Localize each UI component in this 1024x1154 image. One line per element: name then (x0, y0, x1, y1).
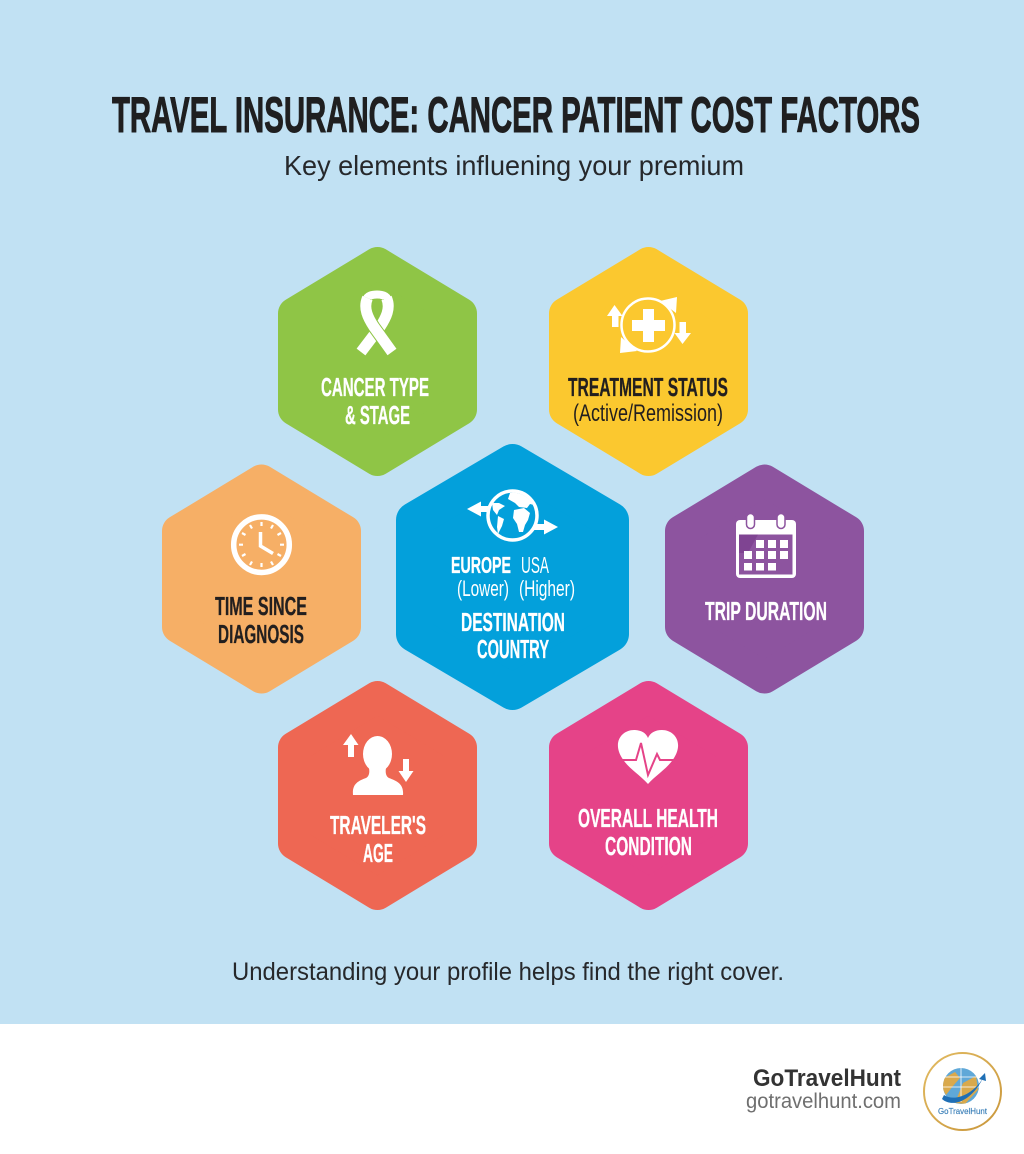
icon: globe with arrows (467, 491, 558, 540)
logo wordmark: GoTravelHunt (938, 1106, 988, 1116)
logo globe (942, 1068, 986, 1104)
icon: heart with pulse (618, 730, 679, 784)
icon: treatment cycle (607, 297, 691, 353)
label: TRAVELER'S (330, 812, 426, 840)
hexagon: orange (178, 480, 345, 678)
panel: destination country (414, 462, 611, 692)
label: TRIP DURATION (705, 598, 827, 626)
hexagon: yellow (565, 263, 732, 460)
panel: treatment status (565, 263, 732, 460)
icon: calendar (736, 514, 796, 578)
brand name: GoTravelHunt (753, 1065, 901, 1092)
panel: traveler's age (294, 697, 461, 894)
label: Europe and USA: (Higher) (519, 576, 575, 601)
label (215, 593, 307, 649)
label (568, 374, 728, 427)
label: TREATMENT STATUS (568, 374, 728, 402)
panel: cancer type and stage (294, 263, 461, 460)
label (330, 812, 426, 868)
icon: person with arrows (343, 734, 414, 795)
label (578, 805, 718, 861)
panel: overall health condition (565, 697, 732, 894)
subtitle: Key elements influening your premium (284, 150, 744, 181)
label: OVERALL HEALTH (578, 805, 718, 833)
label: COUNTRY (477, 636, 549, 664)
footer panel (0, 1024, 1024, 1154)
label: TIME SINCE (215, 593, 307, 621)
brand url: gotravelhunt.com (746, 1090, 901, 1113)
panel: time since diagnosis (178, 480, 345, 678)
icon: clock (234, 517, 289, 572)
label: CONDITION (605, 833, 692, 861)
label (461, 609, 565, 664)
label: Europe and USA: (Lower) (457, 576, 509, 601)
hexagon: red (294, 697, 461, 894)
panel: trip duration (681, 480, 848, 678)
label: & STAGE (345, 402, 410, 430)
label: CANCER TYPE (321, 374, 429, 402)
label: Europe and USA: EUROPE (451, 552, 511, 578)
hexagon: blue (414, 462, 611, 692)
closing note: Understanding your profile helps find the right cover. (232, 958, 784, 986)
hexagon: purple (681, 480, 848, 678)
hexagon: pink (565, 697, 732, 894)
label: DIAGNOSIS (218, 621, 304, 649)
label: AGE (363, 840, 393, 868)
logo badge (924, 1053, 1001, 1130)
icon: ribbon (361, 294, 392, 352)
label (321, 374, 429, 430)
label: DESTINATION (461, 609, 565, 637)
label: Europe and USA: USA (521, 552, 549, 578)
hexagon: green (294, 263, 461, 460)
label: (Active/Remission) (573, 400, 723, 427)
label: Europe and USA (451, 552, 575, 601)
